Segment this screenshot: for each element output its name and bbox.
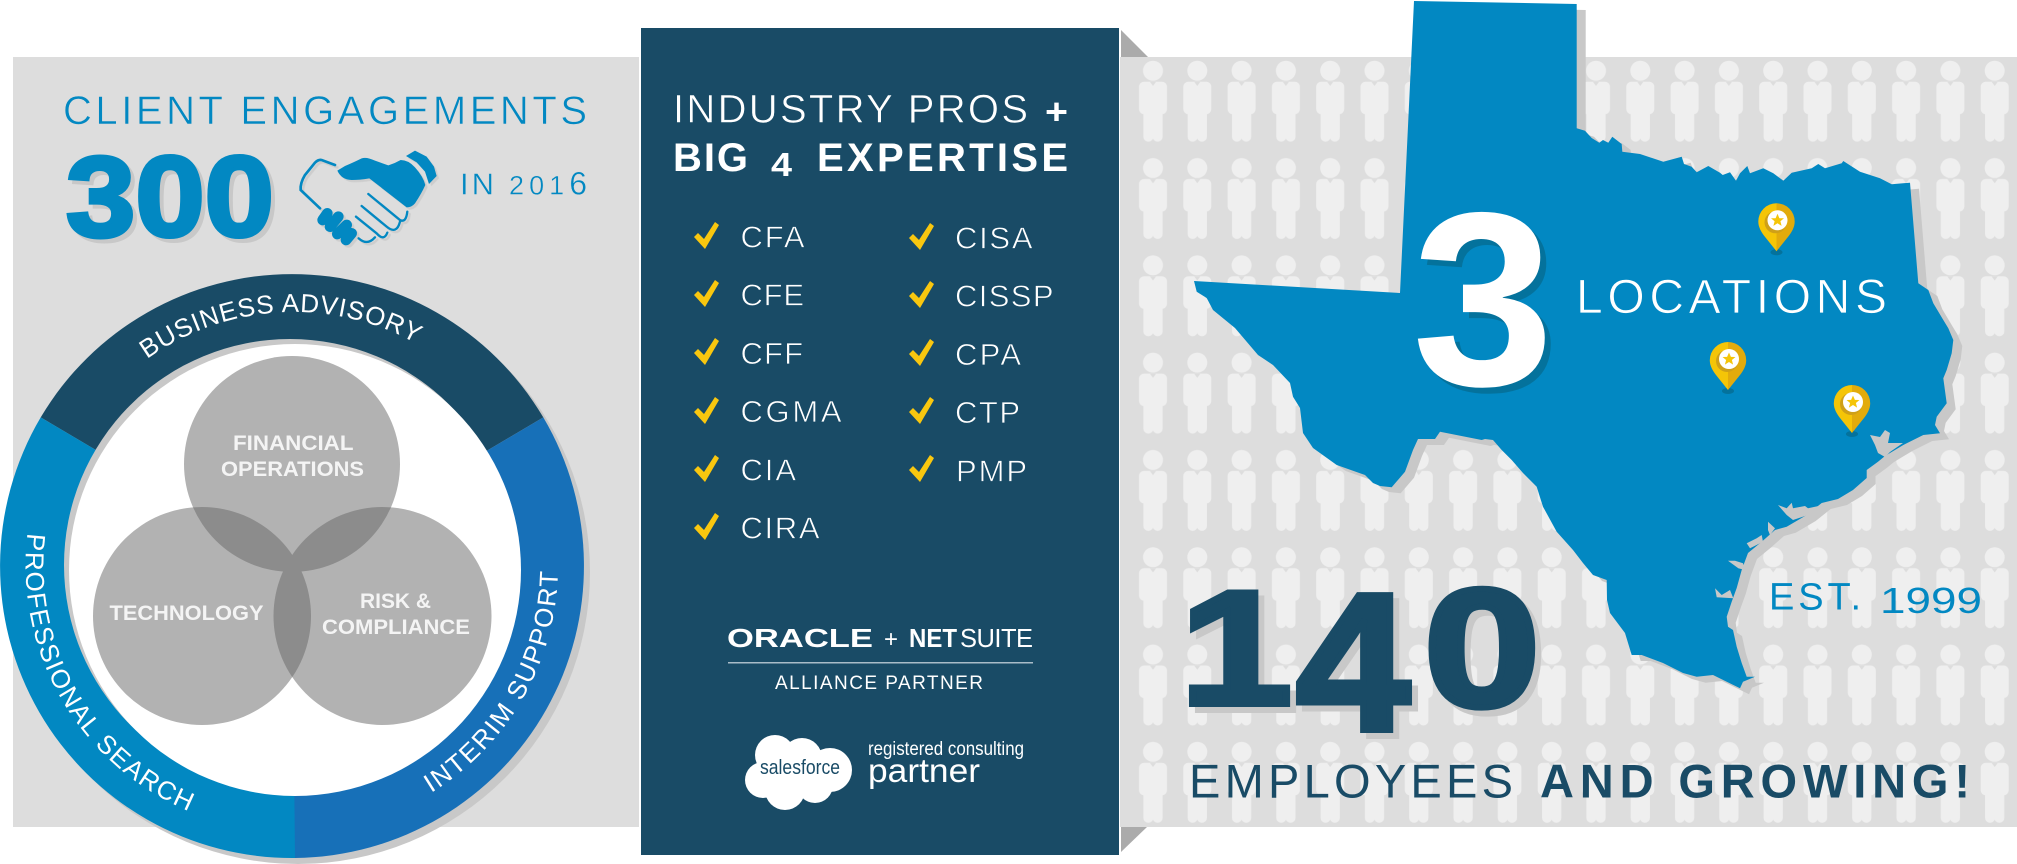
oracle wordmark: ORACLE [727,625,873,653]
label: employees and growing: EMPLOYEES [1189,754,1513,808]
credential: CIRA: CIRA [740,511,820,546]
suite wordmark: SUITE [960,625,1033,653]
credential: CISSP: CISSP [955,279,1054,314]
logo: salesforce [745,735,1024,810]
venn label: operations: OPERATIONS [221,458,364,481]
credential: CFF: CFF [740,336,803,371]
net wordmark: NET [909,625,957,653]
ring label: interim support: INTERIM SUPPORT [424,571,558,792]
ring segment: professional search [0,417,295,858]
credential: PMP: PMP [956,454,1027,488]
panel: industry pros [641,28,1119,855]
venn label: financial: FINANCIAL [233,432,354,455]
ring label: professional search: PROFESSIONAL SEARCH [25,535,194,810]
heading: plus: + [1045,91,1068,132]
label: established 1999 [1769,576,1982,621]
icon: location pin south east [1834,385,1870,437]
big number: 140 [1180,553,1540,772]
panel: people background [1120,57,2017,827]
credential: CFA: CFA [740,220,805,254]
salesforce cloud [745,735,852,810]
ring segment: interim support [292,417,584,858]
ring segment: business advisory [41,274,543,566]
credential: CIA: CIA [740,452,796,488]
alliance partner label: ALLIANCE PARTNER [775,673,983,694]
credential checklist [740,220,1054,546]
label: locations: LOCATIONS [1576,271,1887,324]
fold: bottom corner [1121,827,1147,852]
chart: service ring [0,274,590,864]
bays along the coast [1715,430,1903,598]
heading: 4: 4 [771,146,793,183]
credential: CFE: CFE [740,278,804,313]
credential: CPA: CPA [955,337,1021,372]
credential: CTP: CTP [955,395,1020,430]
venn circle: financial operations [184,356,400,572]
fold: top corner [1121,30,1148,57]
chart: venn diagram [93,356,492,725]
plus sign: + [884,626,898,653]
ring label: business advisory: BUSINESS ADVISORY [138,294,424,358]
heading: big: BIG [673,136,748,180]
venn circle: risk and compliance [274,507,492,725]
panel: client engagements [13,57,639,827]
big number: 140: 1 [1180,558,1292,739]
label: employees and growing [1189,754,1970,808]
big number: 3: 3 [1412,160,1554,438]
heading: industry pros: INDUSTRY PROS [673,88,1028,132]
label: established 1999: EST. [1769,576,1861,618]
registered consulting: registered consulting [868,739,1024,760]
icon: handshake [301,151,437,242]
big number: 140: 4 [1296,553,1410,772]
heading: client engagements: CLIENT ENGAGEMENTS [63,89,587,133]
label: 2016: 2016 [509,166,587,202]
label: established 1999: 1999 [1880,580,1982,621]
label: in: IN [460,166,494,202]
heading: expertise: EXPERTISE [817,136,1068,180]
big number: 300: 300 [66,134,274,261]
venn label: technology: TECHNOLOGY [110,602,264,625]
credential: CGMA: CGMA [740,394,842,429]
label: employees and growing: AND GROWING! [1540,754,1970,808]
big number: 140: 0 [1424,554,1540,742]
icons: check marks [694,222,934,540]
salesforce wordmark: salesforce [760,757,840,779]
icon: location pin north [1758,203,1795,255]
venn circle: technology [93,507,311,725]
logo: oracle netsuite [727,625,1033,694]
credential: CISA: CISA [955,220,1033,256]
icon: location pin central [1710,342,1746,394]
venn label: risk: RISK & [360,590,431,613]
partner: partner [868,752,980,789]
map: texas [1194,1,1962,694]
venn label: compliance: COMPLIANCE [322,616,470,639]
